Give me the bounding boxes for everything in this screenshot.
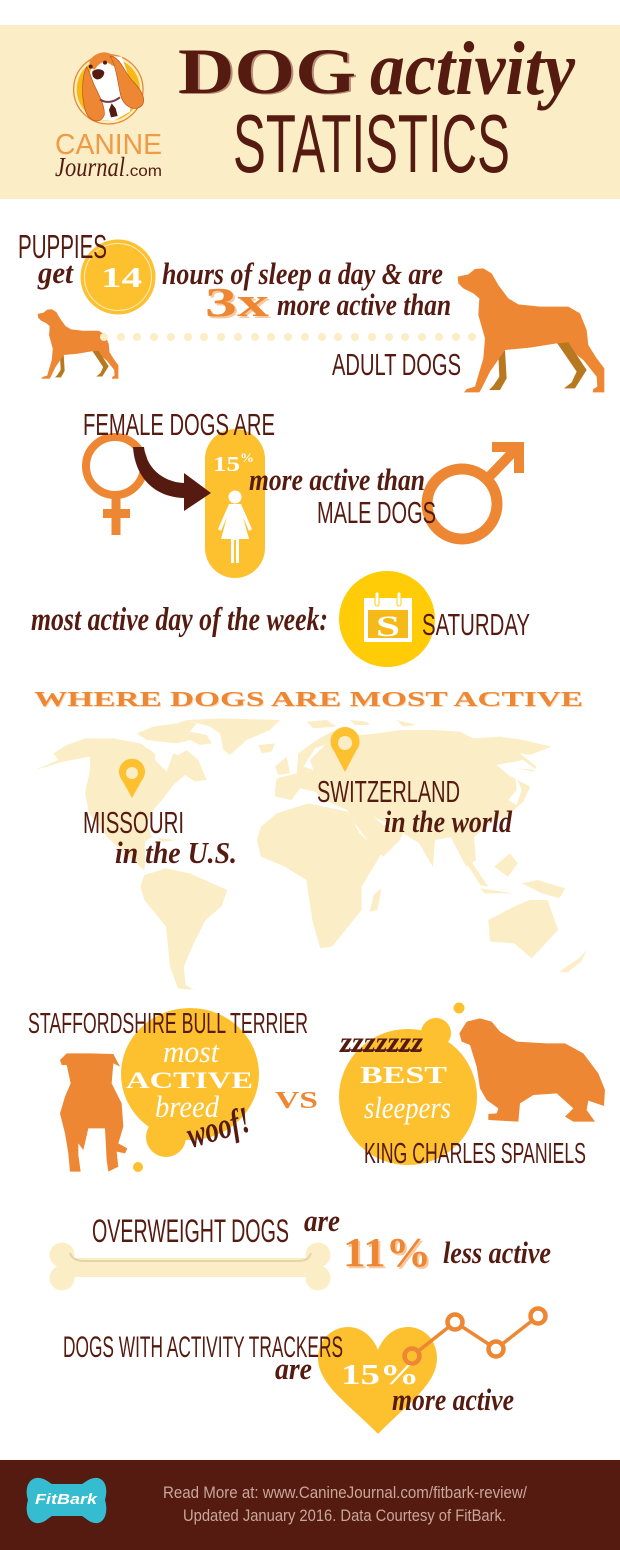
panel: puppies vs adult dogs xyxy=(18,228,604,392)
icon: female symbol xyxy=(86,437,144,535)
logo: FitBark: FitBark xyxy=(35,1491,98,1508)
logo: FitBark xyxy=(27,1478,106,1523)
icon: adult dog xyxy=(458,268,604,392)
map xyxy=(35,718,587,990)
icon: basset hound xyxy=(74,52,144,124)
icon: bone xyxy=(50,1242,330,1290)
icon: calendar circle xyxy=(339,571,435,667)
stat: 11 percent: 11% xyxy=(345,1231,433,1277)
logo text: .com: .com xyxy=(125,163,162,180)
text: more active: more active xyxy=(392,1382,514,1417)
pill: 15 percent xyxy=(205,429,265,578)
text: ACTIVE: ACTIVE xyxy=(126,1068,253,1093)
icon: woman xyxy=(218,490,252,563)
text: are: are xyxy=(304,1203,340,1238)
text: female dogs are: FEMALE DOGS ARE xyxy=(83,407,275,442)
heading: where dogs are most active: WHERE DOGS ARE MOST ACTIVE xyxy=(35,688,584,712)
icon: pin Missouri xyxy=(119,759,145,798)
text: breed: breed xyxy=(155,1089,219,1124)
text: adult dogs: ADULT DOGS xyxy=(332,347,461,382)
text: vs: VS xyxy=(275,1088,318,1114)
icon: heart xyxy=(318,1327,437,1434)
icon: 14 hours circle xyxy=(80,240,156,314)
icon: terrier silhouette xyxy=(60,1053,127,1172)
arrow xyxy=(133,447,211,511)
pill: 15 percent: 15 xyxy=(213,452,240,476)
text: more active than: more active than xyxy=(277,287,451,322)
text: more active than: more active than xyxy=(249,462,425,497)
text: Staffordshire Bull Terrier: STAFFORDSHIRE BULL TERRIER xyxy=(28,1008,308,1040)
line chart xyxy=(404,1308,546,1364)
panel: footer xyxy=(0,1460,620,1550)
text: dogs with activity trackers: DOGS WITH ACTIVITY TRACKERS xyxy=(63,1331,343,1364)
stat: 15 percent: 15% xyxy=(341,1360,419,1391)
text: in the U.S.: in the U.S. xyxy=(115,835,237,870)
text: saturday: SATURDAY xyxy=(422,607,530,642)
dotted line xyxy=(100,333,476,341)
text: male dogs: MALE DOGS xyxy=(317,495,436,530)
stat: 3x: 3x xyxy=(207,281,272,327)
logo: Canine Journal xyxy=(55,52,162,182)
text: less active: less active xyxy=(443,1235,551,1270)
bubble xyxy=(339,1002,477,1165)
text: woof: woof! xyxy=(182,1100,255,1157)
stat: 3x: 3x xyxy=(205,279,270,325)
text: Missouri: MISSOURI xyxy=(83,805,184,840)
panel: header xyxy=(0,25,620,199)
logo text: Journal: Journal xyxy=(55,152,125,182)
text: are: are xyxy=(275,1351,312,1386)
panel: most active breed xyxy=(28,1008,308,1172)
icon: male symbol xyxy=(427,442,524,539)
panel: world map xyxy=(35,718,587,990)
pill: 15 percent: % xyxy=(240,450,254,465)
heading: where dogs are most active xyxy=(34,687,584,712)
panel: activity trackers xyxy=(63,1308,546,1434)
text: hours of sleep: hours of sleep a day & are xyxy=(162,256,443,291)
text: most: most xyxy=(163,1034,220,1069)
title xyxy=(178,27,575,190)
logo text: Canine: CANINE xyxy=(55,129,162,161)
icon: calendar circle: S xyxy=(376,610,400,643)
text: read more: Read More at: www.CanineJournal.com/fitbark-review/ xyxy=(163,1483,527,1502)
text: puppies: PUPPIES xyxy=(18,228,107,265)
panel: overweight dogs xyxy=(50,1203,551,1290)
text: overweight dogs: OVERWEIGHT DOGS xyxy=(92,1213,289,1249)
heading: where dogs are most active: WHERE DOGS ARE MOST ACTIVE xyxy=(34,687,583,711)
panel: female vs male dogs xyxy=(83,407,524,578)
text: zzzzzzz: zzzzzzz xyxy=(339,1026,423,1059)
icon: pin Switzerland xyxy=(330,727,360,772)
stat: 3x xyxy=(205,279,272,327)
text: most active day: most active day of the week: xyxy=(31,602,328,638)
panel: best sleepers xyxy=(339,1002,605,1170)
bubble xyxy=(121,1008,259,1172)
text: BEST: BEST xyxy=(360,1063,447,1089)
text: sleepers: sleepers xyxy=(364,1090,451,1125)
panel: most active day xyxy=(31,571,530,667)
icon: 14 hours circle: 14 xyxy=(101,263,142,294)
text: get: get xyxy=(37,255,74,290)
text: Switzerland: SWITZERLAND xyxy=(317,774,460,809)
stat: 11 percent: 11% xyxy=(343,1229,431,1275)
text: updated: Updated January 2016. Data Courtesy of FitBark. xyxy=(183,1506,506,1525)
title: activity xyxy=(370,27,575,111)
icon: small dog xyxy=(38,309,118,379)
title: DOG xyxy=(178,36,356,108)
title: DOG xyxy=(180,37,358,109)
text: in the world: in the world xyxy=(384,804,512,839)
icon: spaniel silhouette xyxy=(459,1018,605,1122)
